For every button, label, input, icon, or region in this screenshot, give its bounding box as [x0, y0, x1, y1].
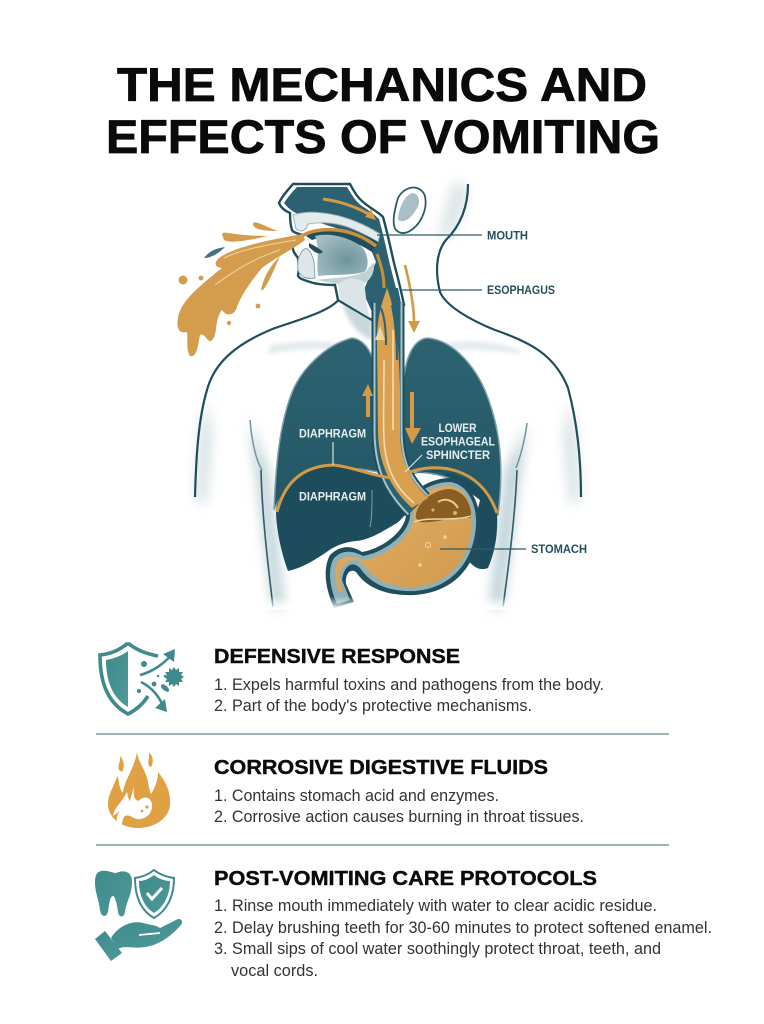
panel: defensive response — [100, 643, 604, 715]
label: esophagus: ESOPHAGUS — [487, 285, 555, 297]
heading: DEFENSIVE RESPONSE — [214, 645, 460, 668]
heading: CORROSIVE DIGESTIVE FLUIDS — [214, 756, 548, 779]
icon: tooth, shield and hand — [95, 870, 182, 961]
label: lower esophageal sphincter: ESOPHAGEAL — [421, 436, 495, 448]
stomach — [326, 478, 480, 608]
soft fade at bottom of torso — [190, 596, 590, 610]
icon: flame with stomach — [108, 752, 170, 828]
esophagus fluid — [377, 288, 428, 508]
text block: 2. Part of the body's protective mechanisms. — [214, 696, 532, 715]
vomit spray — [177, 222, 305, 356]
head cross-section — [279, 184, 404, 320]
text block — [214, 786, 584, 826]
text block: 1. Contains stomach acid and enzymes. — [214, 786, 499, 805]
diaphragm line — [277, 465, 497, 513]
label: lower esophageal sphincter: LOWER — [438, 423, 477, 435]
title — [106, 58, 660, 163]
label: lower esophageal sphincter — [405, 423, 495, 472]
esophagus wall — [368, 288, 418, 505]
lungs — [274, 338, 501, 571]
text block — [214, 675, 604, 715]
text block: 2. Corrosive action causes burning in throat tissues. — [214, 807, 584, 826]
nasal arrow — [323, 199, 376, 220]
text block: vocal cords. — [231, 961, 318, 980]
label: diaphragm upper — [299, 428, 366, 465]
text block — [214, 896, 712, 980]
ear — [394, 188, 426, 233]
icon: shield with pathogens — [100, 643, 184, 714]
title: EFFECTS OF VOMITING — [106, 110, 660, 163]
heading: POST-VOMITING CARE PROTOCOLS — [214, 867, 597, 890]
body outline — [195, 184, 581, 497]
panel: corrosive digestive fluids — [108, 752, 584, 828]
anatomy illustration — [177, 184, 590, 610]
text block: 1. Rinse mouth immediately with water to clear acidic residue. — [214, 896, 657, 915]
white gap between liver and stomach — [356, 516, 410, 553]
label: mouth: MOUTH — [487, 230, 528, 242]
panel: post-vomiting care protocols — [95, 867, 712, 980]
label: stomach: STOMACH — [531, 544, 587, 556]
text block: 1. Expels harmful toxins and pathogens from the body. — [214, 675, 604, 694]
title: THE MECHANICS AND — [117, 58, 647, 111]
label: lower esophageal sphincter: SPHINCTER — [426, 450, 491, 462]
label: diaphragm upper: DIAPHRAGM — [299, 428, 366, 440]
text block: 2. Delay brushing teeth for 30-60 minutes to protect softened enamel. — [214, 918, 712, 937]
flow arrows — [362, 265, 421, 444]
text block: 3. Small sips of cool water soothingly protect throat, teeth, and — [214, 939, 661, 958]
body silhouette — [195, 184, 581, 608]
label: diaphragm lower: DIAPHRAGM — [299, 492, 366, 504]
